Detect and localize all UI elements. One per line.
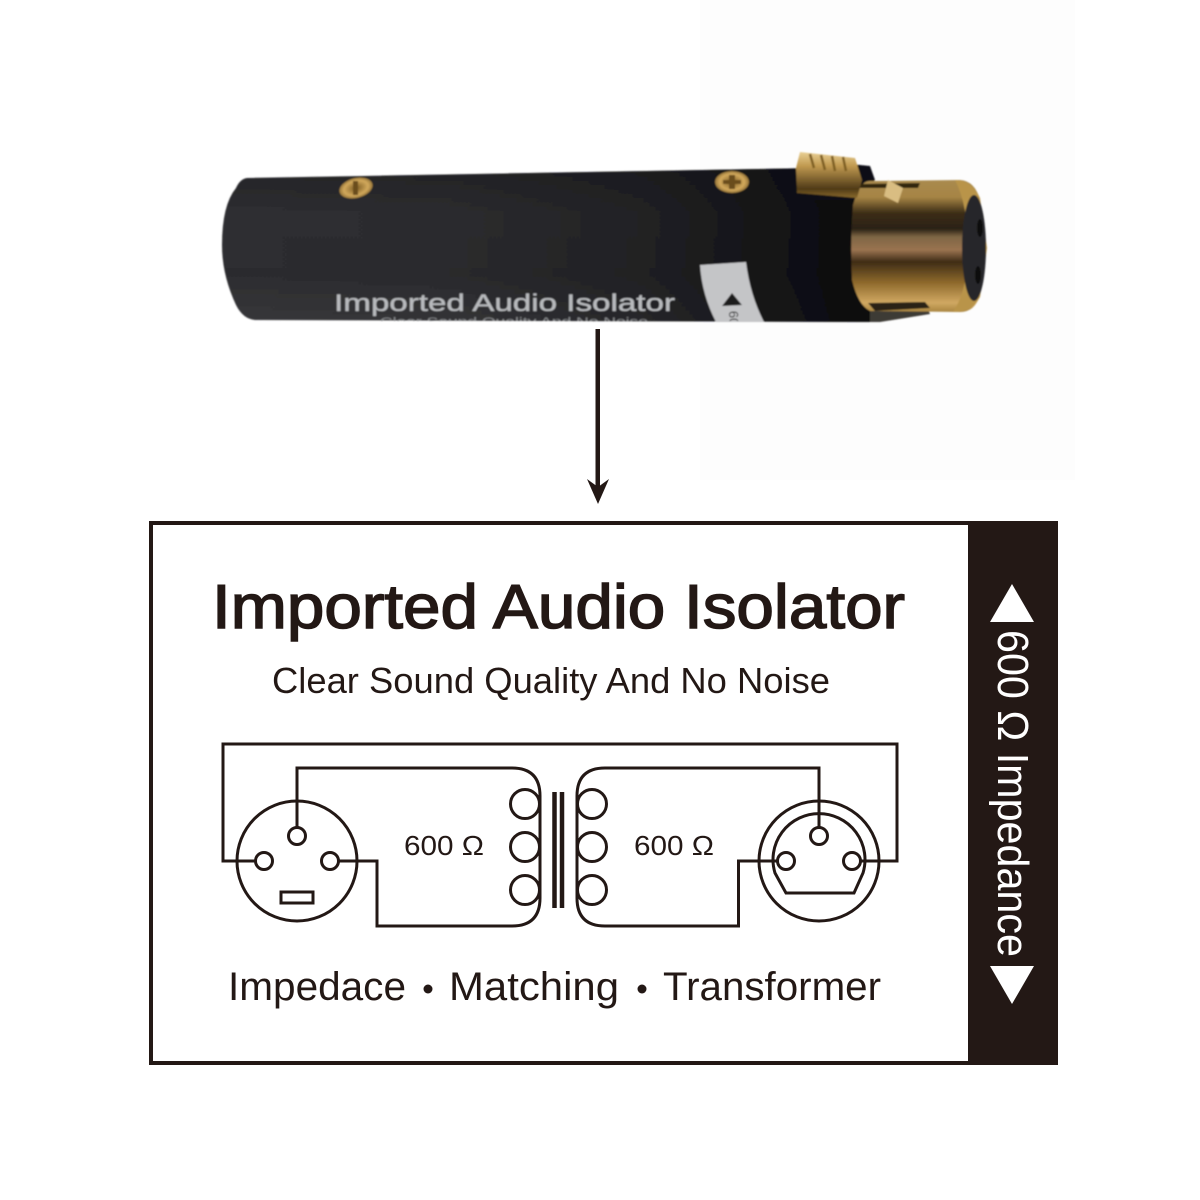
side band vertical text: 600 Ω Impedance (988, 630, 1037, 957)
caption: Transformer (663, 965, 881, 1009)
collar rim (953, 180, 987, 312)
transformer core (554, 792, 562, 908)
title: Imported Audio Isolator (212, 573, 905, 642)
arrow: photo to label (587, 329, 609, 504)
left coils (510, 790, 540, 904)
isolator body (222, 167, 870, 322)
latch (796, 152, 862, 198)
photo background tint (700, 0, 1075, 480)
body shading (222, 167, 870, 322)
side band (968, 521, 1058, 1065)
collar slot top (860, 183, 920, 188)
screw left (337, 174, 375, 202)
right XLR connector (759, 801, 879, 921)
right coils (578, 790, 606, 904)
right impedance label: 600 Ω (634, 830, 714, 861)
body printed subtitle: Clear Sound Quality And No Noise (380, 316, 648, 328)
right transformer winding wire (577, 768, 819, 926)
socket holes (975, 219, 983, 284)
left XLR connector (237, 801, 357, 921)
connector rear clip (850, 302, 930, 322)
caption: Impedace (228, 965, 406, 1009)
caption: Matching (449, 965, 619, 1009)
left transformer winding wire (297, 768, 540, 926)
side band bottom triangle (990, 966, 1034, 1004)
latch ridges (810, 154, 846, 171)
socket face (962, 195, 986, 301)
panel: isolator label (151, 521, 1058, 1065)
label text: 60 (726, 311, 741, 326)
product photo: XLR audio isolator (222, 152, 987, 328)
gold collar (851, 180, 985, 312)
left impedance label: 600 Ω (404, 830, 484, 861)
body label (700, 262, 764, 322)
panel frame (151, 523, 1056, 1063)
side band top triangle (990, 584, 1034, 622)
outer ground wire (223, 744, 897, 861)
wiring diagram (223, 744, 897, 926)
body printed title: Imported Audio Isolator (334, 290, 675, 317)
screw right (715, 171, 749, 193)
latch button (884, 180, 903, 203)
socket notch (786, 164, 875, 200)
subtitle: Clear Sound Quality And No Noise (272, 660, 830, 701)
label arrow (722, 293, 742, 306)
caption (228, 965, 881, 1009)
collar slot bottom (868, 302, 930, 311)
